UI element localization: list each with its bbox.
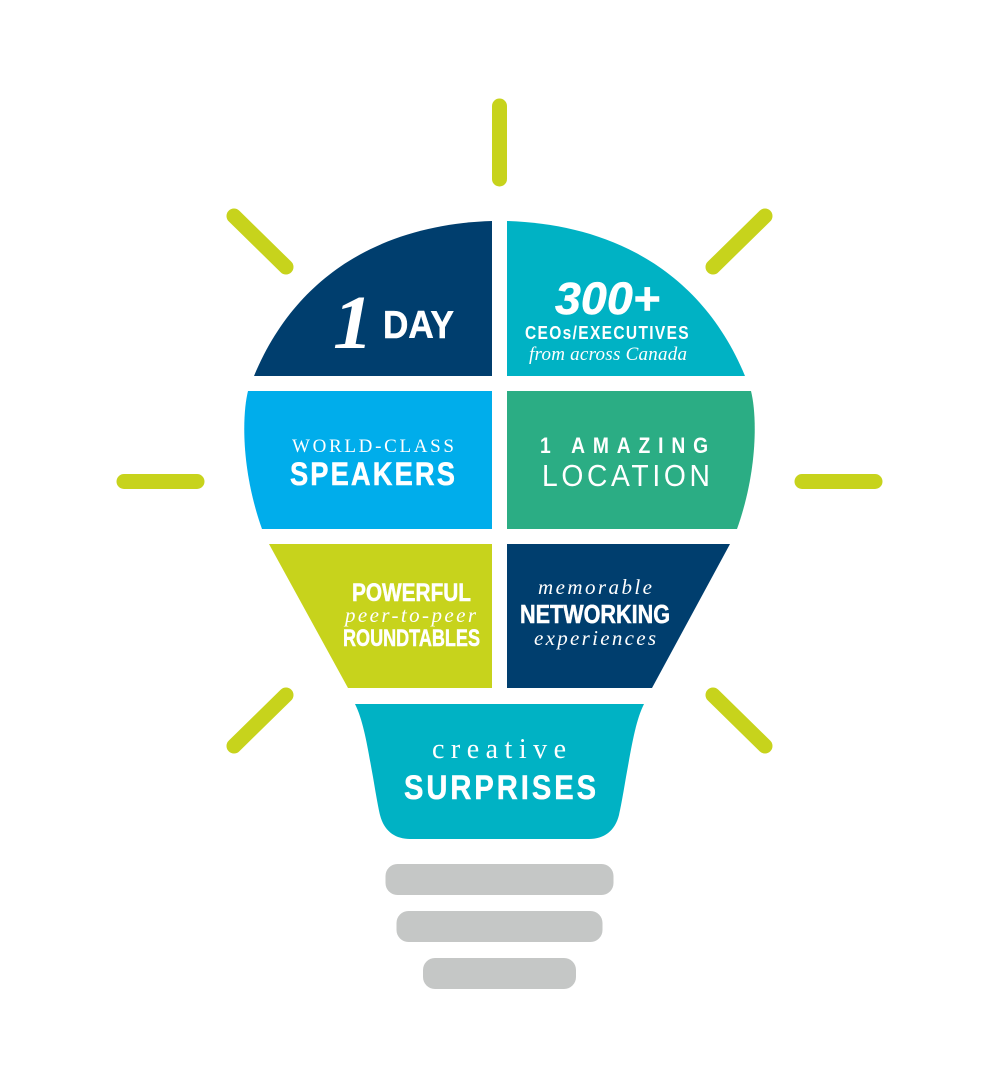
light rays xyxy=(124,106,875,746)
panel: memorable networking xyxy=(507,544,730,688)
label speakers: SPEAKERS xyxy=(290,456,457,492)
panel: powerful roundtables xyxy=(269,544,492,688)
ray: upper left xyxy=(234,216,286,267)
label location: LOCATION xyxy=(542,458,714,493)
ray: left xyxy=(124,474,197,489)
ray: top xyxy=(492,106,507,179)
number 300+: 300+ xyxy=(555,273,660,324)
panel shape xyxy=(507,544,730,688)
label powerful: POWERFUL xyxy=(352,579,471,607)
base bar 1 xyxy=(386,864,614,895)
label roundtables: ROUNDTABLES xyxy=(343,625,480,652)
label networking: NETWORKING xyxy=(520,601,670,629)
label peer-to-peer: peer-to-peer xyxy=(343,603,477,627)
label experiences: experiences xyxy=(534,626,656,650)
panel: 1 amazing location xyxy=(507,391,755,529)
base bar 3 xyxy=(423,958,576,989)
panel shape xyxy=(269,544,492,688)
ray: lower left xyxy=(234,695,286,746)
label surprises: SURPRISES xyxy=(404,769,599,807)
panel shape xyxy=(507,221,745,376)
ray: upper right xyxy=(713,216,765,267)
panel: world-class speakers xyxy=(244,391,492,529)
panel shape xyxy=(355,704,644,839)
panel shape xyxy=(254,221,492,376)
ray: lower right xyxy=(713,695,765,746)
panel: 300+ executives xyxy=(507,221,745,376)
label memorable: memorable xyxy=(538,575,652,599)
base bar 2 xyxy=(396,911,602,942)
label creative: creative xyxy=(432,734,566,765)
label 1 amazing: 1 AMAZING xyxy=(540,433,716,458)
label world-class: WORLD-CLASS xyxy=(292,436,454,457)
label from across Canada: from across Canada xyxy=(529,344,687,365)
label day: DAY xyxy=(383,304,454,347)
panel shape xyxy=(244,391,492,529)
bulb base xyxy=(386,864,614,989)
panel shape xyxy=(507,391,755,529)
panel: 1 day xyxy=(254,221,492,376)
number 1: 1 xyxy=(333,281,373,365)
ray: right xyxy=(802,474,875,489)
label executives: CEOs/EXECUTIVES xyxy=(525,322,690,343)
panel: creative surprises xyxy=(355,704,644,839)
